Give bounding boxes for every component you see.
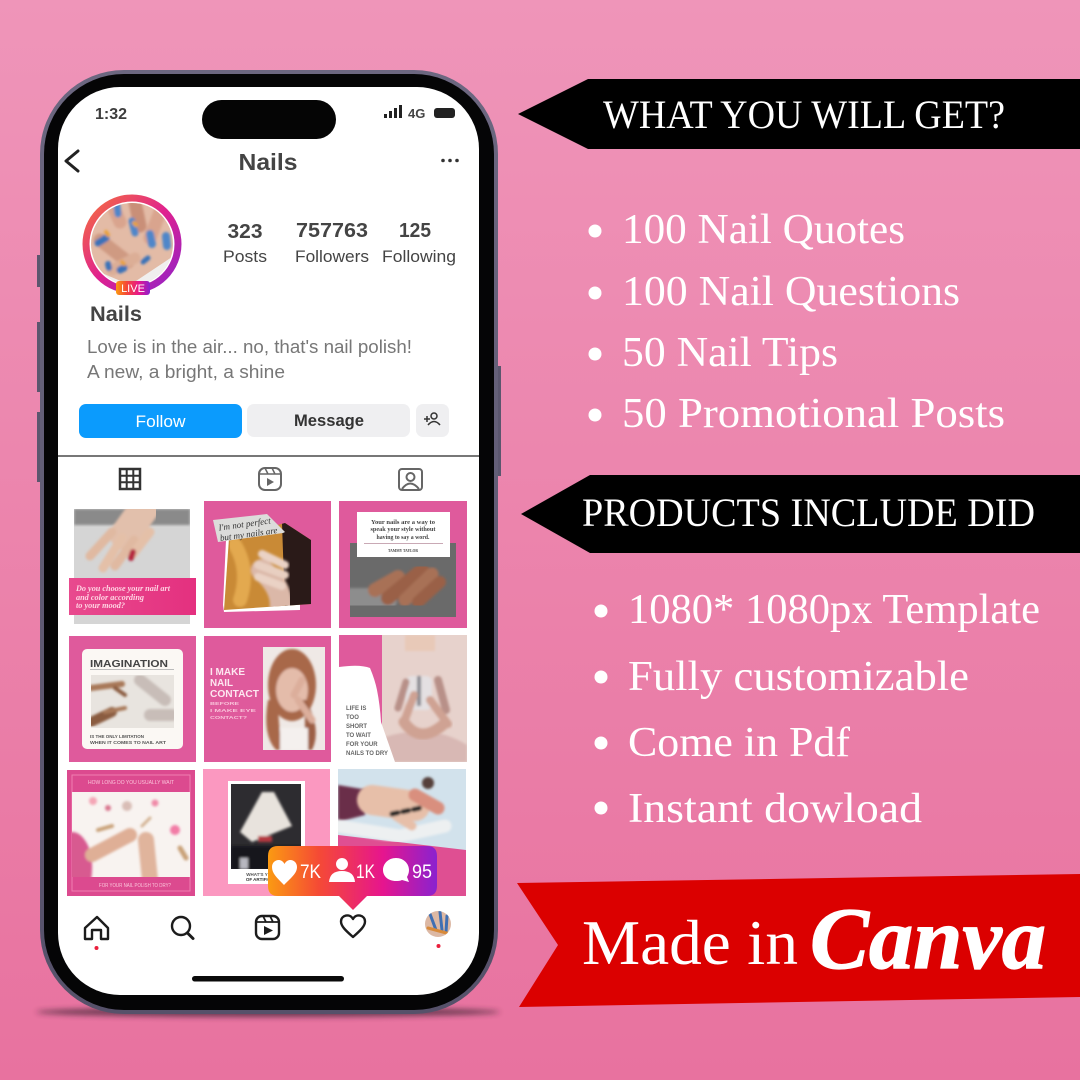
profile buttons: [79, 404, 449, 438]
post: your nails are a way: Your nails are a way to: [371, 519, 435, 526]
profile avatar: [86, 198, 178, 295]
list: what you will get: 100 Nail Questions: [622, 269, 960, 315]
post: i make nail contact: I MAKE EYE: [210, 708, 256, 713]
profile stats: 757763: [296, 220, 368, 242]
post: i'm not perfect: but my nails are: [219, 525, 278, 543]
list: what you will get: 50 Nail Tips: [622, 330, 838, 376]
post: your nails are a way: having to say a word.: [376, 534, 430, 541]
post: life is too short: LIFE IS: [346, 706, 366, 712]
post: do you choose your nail art: and color according: [76, 592, 145, 602]
ribbon: what you will get: WHAT YOU WILL GET?: [603, 92, 1005, 137]
notification badge: 1K: [356, 862, 375, 883]
icon: comment: [383, 858, 409, 882]
profile bio: [87, 303, 412, 382]
dynamic island: [202, 100, 336, 139]
profile stats: Followers: [295, 247, 369, 266]
post: i make nail contact: CONTACT?: [210, 715, 247, 720]
post: do you choose your nail art: Do you choose your nail art: [75, 583, 171, 593]
post: your nails are a way: [339, 501, 467, 628]
notification badge: 95: [412, 862, 432, 883]
post: i'm not perfect: I'm not perfect: [217, 515, 272, 533]
post: i'm not perfect: [204, 501, 331, 628]
notification badge: [268, 846, 437, 910]
profile header: Nails: [238, 149, 298, 175]
list: products include: 1080* 1080px Template: [628, 587, 1040, 633]
banner: made in canva: [517, 874, 1080, 1007]
profile stats: Following: [382, 247, 456, 266]
list: products include: Fully customizable: [628, 654, 969, 700]
tab icons: [120, 468, 422, 490]
post: how long do you usually wait: HOW LONG DO YOU USUALLY WAIT: [88, 780, 175, 786]
post grid: [67, 500, 467, 896]
post: life is too short: TO WAIT: [346, 733, 371, 739]
banner: made in canva: Canva: [810, 891, 1046, 988]
ribbon: products include: [521, 475, 1080, 553]
post: life is too short: [339, 635, 467, 762]
post: do you choose your nail art: [69, 509, 196, 624]
post: i make nail contact: CONTACT: [210, 689, 259, 700]
list: products include: Instant dowload: [628, 786, 922, 832]
list: what you will get: [588, 207, 1005, 437]
icon: profile avatar: [425, 911, 451, 937]
icon: home: [85, 917, 108, 939]
bottom navigation: [85, 911, 451, 950]
post: imagination: IS THE ONLY LIMITATION: [90, 734, 144, 740]
post: life is too short: TOO: [346, 715, 359, 721]
post: i make nail contact: BEFORE: [210, 701, 239, 706]
post: how long do you usually wait: [67, 770, 195, 896]
post: what's your favorite: OF ARTIFICIAL: [246, 877, 278, 882]
icon: heart: [341, 915, 365, 937]
icon: reels: [256, 916, 279, 939]
post: imagination: WHEN IT COMES TO NAIL ART: [90, 740, 166, 746]
status bar: 4G: [408, 106, 425, 121]
ribbon: products include: PRODUCTS INCLUDE DID: [582, 490, 1035, 535]
status bar: 1:32: [95, 106, 127, 123]
post: i make nail contact: [204, 636, 331, 762]
profile stats: Posts: [223, 247, 267, 266]
post: imagination: IMAGINATION: [90, 658, 168, 670]
post: life is too short: SHORT: [346, 724, 367, 730]
list: what you will get: 50 Promotional Posts: [622, 391, 1005, 437]
profile stats: 125: [399, 220, 431, 242]
post: life is too short: NAILS TO DRY: [346, 751, 388, 757]
profile avatar: LIVE: [121, 283, 145, 295]
profile bio: A new, a bright, a shine: [87, 362, 285, 382]
post: hand with dark nails: [338, 769, 466, 896]
status bar: [95, 105, 455, 123]
icon: heart: [272, 860, 297, 885]
post: what's your favorite: [203, 769, 330, 896]
profile buttons: Message: [294, 412, 364, 430]
post: i make nail contact: I MAKE: [210, 667, 245, 678]
post: how long do you usually wait: FOR YOUR NAIL POLISH TO DRY?: [99, 883, 171, 889]
notification badge: 7K: [300, 862, 321, 883]
icon: search: [172, 917, 193, 938]
ribbon: what you will get: [518, 79, 1080, 149]
banner: made in canva: Made in: [582, 907, 798, 978]
icon: person: [329, 858, 355, 882]
profile stats: 323: [228, 221, 262, 243]
post: imagination: [69, 636, 196, 762]
profile header: [66, 149, 459, 175]
post: life is too short: FOR YOUR: [346, 742, 378, 748]
list: products include: [594, 587, 1040, 832]
profile bio: Nails: [90, 303, 142, 326]
profile bio: Love is in the air... no, that's nail polish!: [87, 337, 412, 357]
post: do you choose your nail art: to your mood?: [76, 600, 125, 610]
home indicator: [192, 976, 344, 982]
profile buttons: Follow: [136, 413, 186, 431]
post: i make nail contact: NAIL: [210, 678, 233, 689]
list: what you will get: 100 Nail Quotes: [622, 207, 905, 253]
post: what's your favorite: WHAT'S YOUR: [246, 872, 278, 877]
list: products include: Come in Pdf: [628, 720, 850, 766]
profile stats: [223, 220, 456, 266]
post: your nails are a way: speak your style without: [370, 526, 436, 533]
phone mockup: [36, 70, 501, 1017]
post: your nails are a way: TAMMY TAYLOR: [388, 548, 419, 553]
